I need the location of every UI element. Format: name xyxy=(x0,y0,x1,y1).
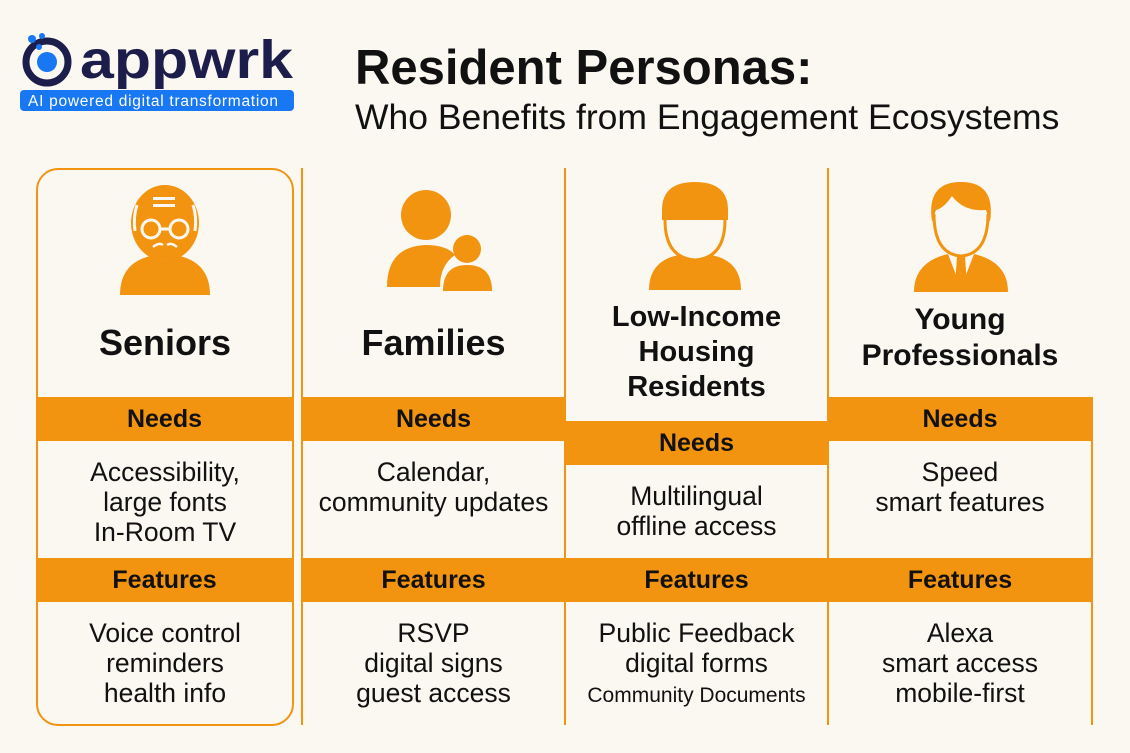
needs band: young: Needs xyxy=(922,405,998,433)
features band: low-income: Features xyxy=(644,566,749,594)
heading: young professionals xyxy=(862,303,1058,372)
features text: seniors: health info xyxy=(104,678,226,708)
title: Resident Personas: xyxy=(355,41,812,95)
features text: young: smart access xyxy=(882,648,1038,678)
needs band: low-income xyxy=(565,421,828,465)
needs text: young: Speed xyxy=(922,457,998,487)
needs text: seniors: large fonts xyxy=(103,487,227,517)
features band: low-income xyxy=(565,558,828,602)
features text: low-income: Public Feedback xyxy=(599,618,794,648)
panel: seniors xyxy=(36,168,294,726)
needs band: families: Needs xyxy=(396,405,471,433)
needs band: seniors: Needs xyxy=(127,405,202,433)
features text: families: RSVP xyxy=(397,618,470,648)
needs text: seniors: Accessibility, xyxy=(90,457,240,487)
features text: seniors xyxy=(89,618,241,708)
icon: young professional xyxy=(914,182,1008,292)
features text: young: Alexa xyxy=(927,618,993,648)
needs band: young xyxy=(828,397,1092,441)
features text: young: mobile-first xyxy=(895,678,1025,708)
heading: low-income: Low-Income xyxy=(612,301,781,333)
needs band: families xyxy=(302,397,565,441)
features band: seniors: Features xyxy=(112,566,217,594)
heading: young professionals: Professionals xyxy=(862,339,1058,372)
heading: low-income xyxy=(612,301,781,403)
subtitle: Who Benefits from Engagement Ecosystems xyxy=(355,97,1059,137)
features band: seniors xyxy=(37,558,292,602)
needs text: young: smart features xyxy=(875,487,1045,517)
heading: families: Families xyxy=(361,322,506,363)
needs text: low-income xyxy=(616,481,777,541)
features text: low-income xyxy=(587,618,806,707)
features band: young: Features xyxy=(908,566,1012,594)
features band: families xyxy=(302,558,565,602)
icon: families xyxy=(387,190,492,291)
features text: low-income: Community Documents xyxy=(587,684,806,707)
features text: families xyxy=(356,618,511,708)
needs text: families xyxy=(319,457,548,517)
heading: young professionals: Young xyxy=(914,303,1006,336)
heading: low-income: Residents xyxy=(627,371,766,403)
heading: low-income: Housing xyxy=(638,336,754,368)
features text: young xyxy=(882,618,1038,708)
features text: low-income: digital forms xyxy=(625,648,768,678)
icon: senior xyxy=(120,185,210,295)
logo xyxy=(20,30,294,111)
features text: families: guest access xyxy=(356,678,511,708)
needs text: families: Calendar, xyxy=(377,457,490,487)
needs band: seniors xyxy=(37,397,292,441)
features text: seniors: reminders xyxy=(106,648,224,678)
heading: seniors: Seniors xyxy=(99,322,231,363)
features text: seniors: Voice control xyxy=(89,618,241,648)
needs text: low-income: offline access xyxy=(616,511,777,541)
features band: young xyxy=(828,558,1092,602)
logo: AI powered digital transformation xyxy=(28,93,278,110)
features text: families: digital signs xyxy=(364,648,503,678)
needs text: low-income: Multilingual xyxy=(630,481,763,511)
needs text: young xyxy=(875,457,1045,517)
needs band: low-income: Needs xyxy=(659,429,734,457)
logo: appwrk xyxy=(80,30,294,90)
needs text: seniors: In-Room TV xyxy=(94,517,236,547)
features band: families: Features xyxy=(381,566,486,594)
needs text: families: community updates xyxy=(319,487,548,517)
icon: low-income resident xyxy=(649,182,741,290)
needs text: seniors xyxy=(90,457,240,547)
